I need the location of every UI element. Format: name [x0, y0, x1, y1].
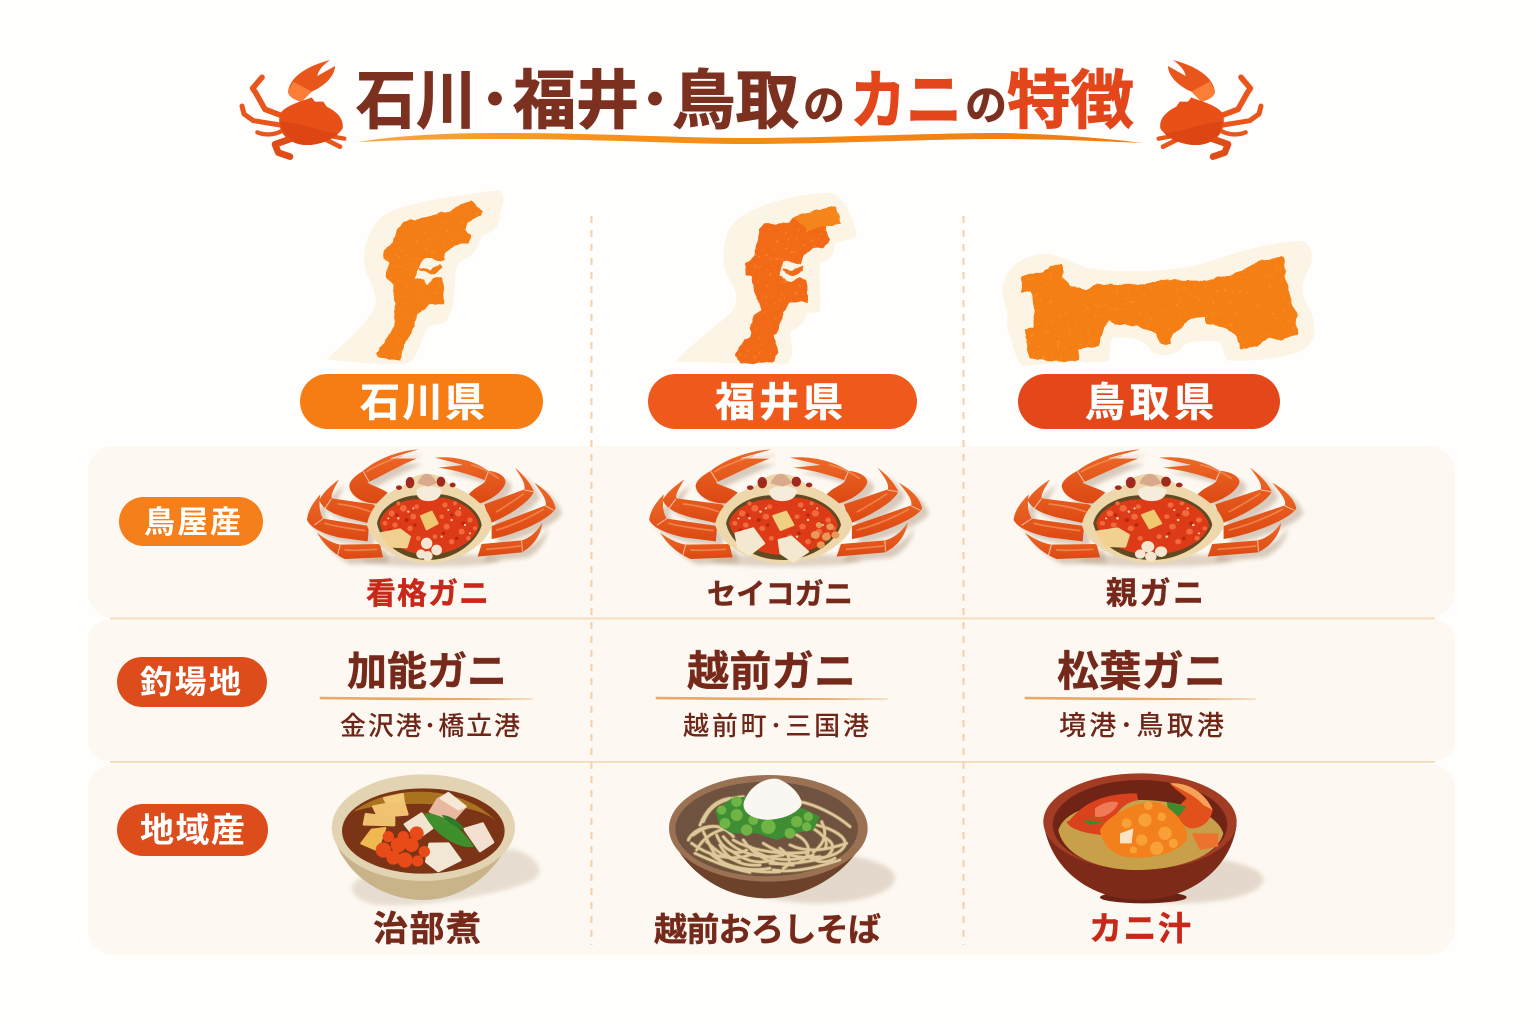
row label: 鳥屋産	[119, 497, 263, 546]
crab illustration: 看格ガニ	[307, 449, 562, 567]
dish: kani-jiru bowl	[1043, 773, 1263, 903]
pill: 鳥取県	[1018, 374, 1280, 429]
title text	[356, 65, 1134, 137]
title block	[242, 60, 1261, 157]
title text: 福井	[513, 65, 639, 137]
panel: row 鳥屋産 background	[88, 446, 1455, 618]
panel: row 地域産 background	[88, 764, 1455, 955]
icon: right crab	[1159, 60, 1261, 157]
row label: 釣場地: 釣場地	[140, 664, 241, 700]
map: Fukui	[677, 193, 857, 364]
dish name: 越前おろしそば: 越前おろしそば	[654, 911, 881, 948]
dish: oroshi soba bowl	[669, 775, 895, 903]
icon: left crab	[242, 60, 344, 157]
title text: ・	[468, 71, 522, 131]
map: Ishikawa	[327, 190, 504, 364]
title text: ・	[628, 71, 682, 131]
row label: 地域産: 地域産	[140, 812, 245, 850]
brand block: 越前ガニ: 越前ガニ	[687, 648, 856, 695]
title underline	[358, 133, 1143, 144]
crab name: セイコガニ: セイコガニ	[707, 578, 853, 611]
pill: 福井県	[648, 374, 917, 429]
row label: 地域産	[117, 804, 268, 856]
pill: 福井県: 福井県	[715, 381, 843, 425]
pill: 鳥取県: 鳥取県	[1085, 381, 1214, 425]
map: Tottori	[1003, 241, 1314, 366]
dish name: カニ汁: カニ汁	[1089, 910, 1191, 947]
dish name: 治部煮: 治部煮	[373, 910, 481, 949]
brand block: 松葉ガニ: 境港･鳥取港	[1059, 711, 1224, 741]
title text: カニ	[850, 65, 962, 137]
title text: の	[965, 82, 1007, 129]
brand block: 加能ガニ: 加能ガニ	[347, 650, 507, 694]
brand block: 加能ガニ	[320, 650, 533, 741]
brand block: 松葉ガニ	[1025, 648, 1256, 741]
crab name: 親ガニ: 親ガニ	[1106, 576, 1204, 611]
title text: の	[803, 82, 845, 129]
title text: 鳥取	[672, 65, 799, 137]
crab illustration: 親ガニ	[1014, 449, 1303, 567]
pill: 石川県: 石川県	[360, 381, 485, 425]
row label: 釣場地	[117, 657, 267, 707]
brand block: 越前ガニ: 越前町･三国港	[683, 711, 869, 741]
title text: 石川	[356, 65, 476, 137]
title text: 特徴	[1007, 65, 1134, 137]
row label: 鳥屋産: 鳥屋産	[144, 505, 241, 540]
crab illustration: セイコガニ	[649, 449, 929, 567]
dish: jibuni bowl	[332, 774, 539, 905]
pill: 石川県	[300, 374, 543, 429]
panel: row 釣場地 background	[88, 620, 1455, 761]
crab name: 看格ガニ: 看格ガニ	[366, 578, 489, 611]
brand block: 松葉ガニ: 松葉ガニ	[1057, 648, 1226, 695]
brand block: 越前ガニ	[656, 648, 888, 741]
brand block: 加能ガニ: 金沢港･橋立港	[340, 711, 520, 741]
